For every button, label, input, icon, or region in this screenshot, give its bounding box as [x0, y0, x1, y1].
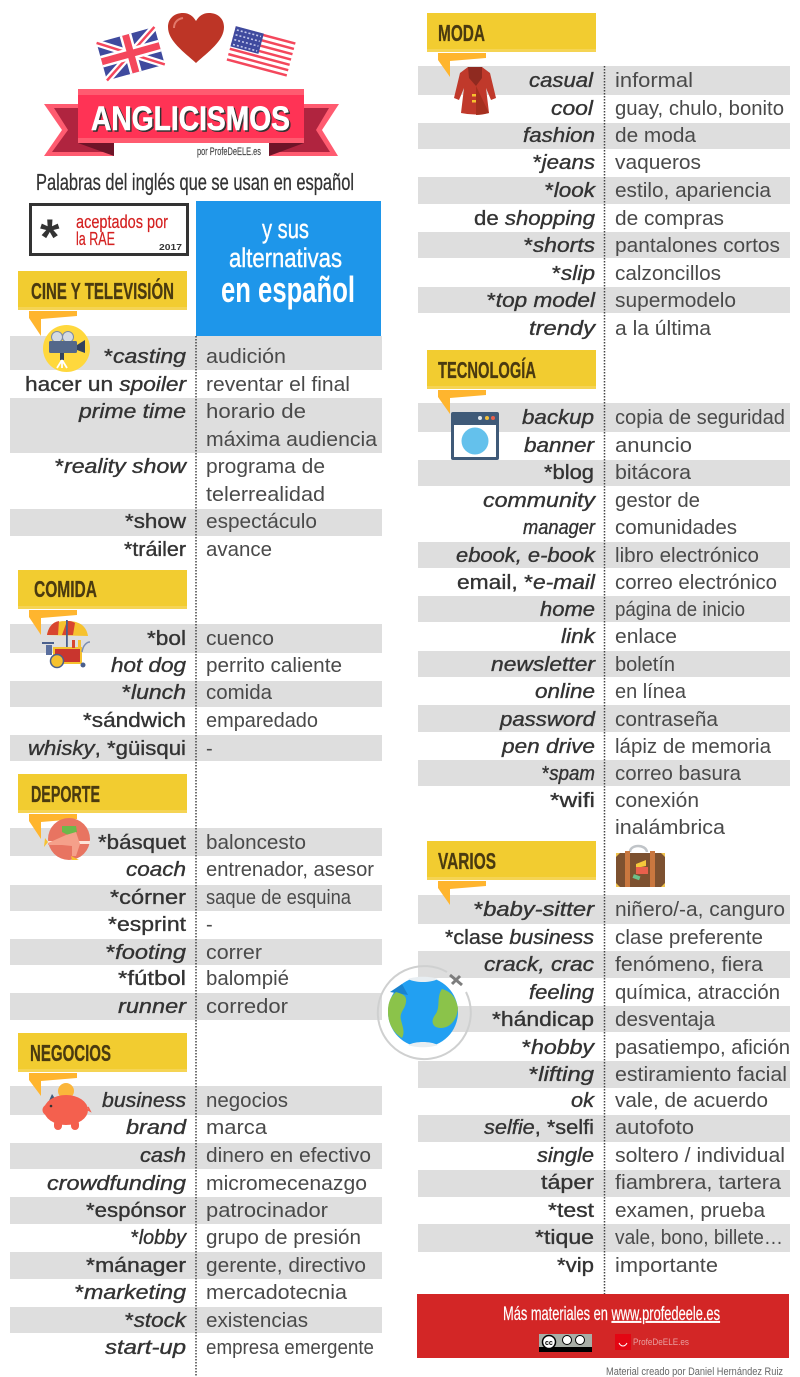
row: business: negocios	[206, 1090, 288, 1112]
row: community manager	[483, 490, 737, 539]
row: prime time	[10, 398, 382, 453]
panel: varios	[418, 895, 790, 1277]
icon: food cart	[42, 620, 90, 668]
row: hobby: *hobby	[522, 1037, 595, 1059]
row: online	[535, 681, 687, 703]
icon: profedeele logo	[615, 1334, 689, 1350]
row: esprint	[108, 914, 213, 936]
row: link: link	[561, 626, 596, 648]
row: fútbol	[118, 968, 289, 990]
subtitle: Palabras del inglés que se usan en español	[36, 169, 354, 195]
row: cool: guay, chulo, bonito	[615, 98, 784, 120]
heading: moda	[427, 13, 596, 77]
row: táper: táper	[541, 1172, 594, 1194]
row: prime time: prime time	[78, 401, 186, 423]
row: coach: coach	[126, 859, 186, 881]
row: jeans	[533, 152, 701, 174]
row: runner: runner	[118, 996, 188, 1018]
row: lunch: comida	[206, 682, 273, 704]
row: email	[457, 572, 777, 594]
row: mánager: *mánager	[86, 1255, 186, 1277]
row: marketing	[75, 1282, 348, 1304]
row: hot dog: hot dog	[111, 655, 186, 677]
row: tique: vale, bono, billete…	[615, 1227, 783, 1249]
row: business: business	[102, 1090, 186, 1112]
row: show: *show	[125, 511, 187, 533]
row: community manager: comunidades	[615, 517, 737, 539]
row: reality show: telerrealidad	[206, 484, 325, 506]
row: shorts: *shorts	[524, 235, 595, 257]
row: slip: *slip	[552, 263, 595, 285]
panel: y sus alternativas en español: y sus	[262, 214, 309, 244]
row: básquet	[10, 828, 382, 856]
row: newsletter	[418, 651, 790, 677]
row: córner	[10, 885, 382, 911]
panel: footer	[417, 1294, 789, 1358]
row: link: enlace	[615, 626, 677, 648]
row: lunch	[10, 681, 382, 707]
row: footing: *footing	[106, 942, 186, 964]
row: tráiler: avance	[206, 539, 272, 561]
row: start-up: empresa emergente	[206, 1337, 374, 1359]
row: wifi: conexión	[615, 790, 699, 812]
row: prime time: máxima audiencia	[206, 429, 378, 451]
row: espónsor: patrocinador	[206, 1200, 328, 1222]
row: hobby	[522, 1037, 790, 1059]
row: fashion	[418, 123, 790, 149]
row: start-up: start-up	[105, 1337, 186, 1359]
panel: deporte	[10, 828, 382, 1020]
icon: suitcase	[616, 846, 665, 887]
row: banner: anuncio	[615, 435, 692, 457]
panel: cine y televisión	[10, 336, 382, 561]
row: básquet: *básquet	[98, 832, 186, 854]
row: ebook: libro electrónico	[615, 545, 759, 567]
title text shadow: ANGLICISMOS	[92, 102, 292, 140]
row: crack: fenómeno, fiera	[615, 954, 764, 976]
row: feeling: química, atracción	[615, 982, 780, 1004]
row: tique	[418, 1224, 790, 1252]
row: fútbol: balompié	[206, 968, 289, 990]
heading: moda: MODA	[438, 20, 485, 46]
row: home: página de inicio	[615, 599, 745, 621]
row: tique: *tique	[535, 1227, 594, 1249]
row: home	[418, 596, 790, 622]
row: community manager: community	[483, 490, 596, 512]
row: marketing: mercadotecnia	[206, 1282, 348, 1304]
row: trendy: trendy	[529, 318, 596, 340]
row: casting	[10, 336, 382, 370]
row: link	[561, 626, 677, 648]
row: coach	[126, 859, 374, 881]
row: cash: dinero en efectivo	[206, 1145, 371, 1167]
row: blog: *blog	[544, 462, 594, 484]
row: shorts: pantalones cortos	[615, 235, 780, 257]
row: crack	[418, 951, 790, 978]
row: marketing: *marketing	[75, 1282, 186, 1304]
row: crack: crack, crac	[484, 954, 594, 976]
row: reality show: *reality show	[55, 456, 188, 478]
row: single: single	[537, 1145, 594, 1167]
row: cash: cash	[140, 1145, 186, 1167]
heading: tecnología: TECNOLOGÍA	[438, 356, 536, 383]
row: hándicap: desventaja	[615, 1009, 716, 1031]
heading: tecnología	[427, 350, 596, 414]
panel: tecnología	[418, 403, 790, 839]
row: lifting: *lifting	[529, 1064, 594, 1086]
icon: british flag	[97, 27, 165, 81]
icon: profedeele logo: ProfeDeELE.es	[633, 1337, 689, 1348]
row: online: online	[535, 681, 595, 703]
row: reality show: programa de	[206, 456, 325, 478]
row: hot dog: perrito caliente	[206, 655, 342, 677]
row: spam: correo basura	[615, 763, 742, 785]
row: crowdfunding: crowdfunding	[47, 1173, 186, 1195]
row: hobby: pasatiempo, afición	[615, 1037, 790, 1059]
heading: comida	[18, 570, 187, 635]
row: email: correo electrónico	[615, 572, 777, 594]
row: baby-sitter: *baby-sitter	[474, 899, 596, 921]
row: look: *look	[545, 180, 596, 202]
row: shopping: de shopping	[474, 208, 595, 230]
icon: piggy bank	[42, 1083, 90, 1130]
icon: american flag	[226, 26, 296, 78]
row: casting: *casting	[104, 346, 186, 368]
row: lobby: grupo de presión	[206, 1227, 361, 1249]
row: casual	[418, 66, 790, 95]
heading: deporte	[18, 774, 187, 839]
row: whisky: -	[206, 738, 213, 760]
row: spoiler	[25, 374, 350, 396]
row: vip: importante	[615, 1255, 718, 1277]
row: pen drive: pen drive	[501, 736, 595, 758]
row: fashion: de moda	[615, 125, 697, 147]
row: show: espectáculo	[206, 511, 317, 533]
row: lobby: *lobby	[131, 1227, 187, 1249]
row: home: home	[540, 599, 595, 621]
row: test	[548, 1200, 766, 1222]
row: backup: backup	[522, 407, 594, 429]
row: footing	[10, 939, 382, 965]
row: blog: bitácora	[615, 462, 692, 484]
row: spoiler: reventar el final	[206, 374, 350, 396]
icon: red coat	[454, 67, 496, 115]
row: whisky	[10, 735, 382, 761]
row: selfie: selfie, *selfi	[484, 1117, 594, 1139]
row: shopping	[474, 208, 724, 230]
row: selfie: autofoto	[615, 1117, 694, 1139]
row: slip	[552, 263, 721, 285]
panel: y sus alternativas en español: en español	[221, 269, 355, 310]
row: cool: cool	[551, 98, 594, 120]
row: shorts	[418, 232, 790, 258]
row: coach: entrenador, asesor	[206, 859, 374, 881]
row: show	[10, 509, 382, 536]
row: jeans: *jeans	[533, 152, 595, 174]
row: vip: *vip	[557, 1255, 594, 1277]
row: fútbol: *fútbol	[118, 968, 186, 990]
icon: heart	[168, 13, 224, 63]
row: tráiler	[124, 539, 272, 561]
heading: comida: COMIDA	[34, 576, 97, 602]
row: backup: copia de seguridad	[615, 407, 785, 429]
row: newsletter: boletín	[615, 654, 675, 676]
row: hándicap	[418, 1006, 790, 1032]
row: password	[418, 705, 790, 732]
row: password: password	[499, 709, 596, 731]
footer link text: Más materiales en www.profedeele.es	[503, 1304, 720, 1325]
row: slip: calzoncillos	[615, 263, 721, 285]
heading: cine y televisión	[18, 271, 187, 336]
title text: ANGLICISMOS	[91, 100, 290, 138]
row: clase business	[445, 927, 763, 949]
row: esprint: -	[206, 914, 213, 936]
row: community manager: gestor de	[615, 490, 700, 512]
row: look	[418, 177, 790, 204]
row: wifi: inalámbrica	[615, 817, 726, 839]
row: feeling	[529, 982, 780, 1004]
row: ok: vale, de acuerdo	[615, 1090, 768, 1112]
legend: aceptados por la RAE: *	[40, 209, 60, 265]
row: runner: corredor	[206, 996, 288, 1018]
row: trendy	[529, 318, 712, 340]
row: esprint: *esprint	[108, 914, 187, 936]
row: hándicap: *hándicap	[492, 1009, 594, 1031]
row: banner: banner	[524, 435, 595, 457]
row: hot dog	[111, 655, 342, 677]
heading: varios	[427, 841, 596, 905]
icon: athlete	[44, 818, 90, 860]
row: selfie	[418, 1115, 790, 1142]
row: ebook: ebook, e-book	[456, 545, 596, 567]
heading: cine y televisión: CINE Y TELEVISIÓN	[31, 277, 174, 304]
row: espónsor	[10, 1197, 382, 1224]
heading: varios: VARIOS	[438, 848, 496, 874]
row: single: soltero / individual	[615, 1145, 785, 1167]
row: casting: audición	[206, 346, 286, 368]
row: spam: *spam	[542, 763, 595, 785]
heading: deporte: DEPORTE	[31, 781, 100, 807]
row: newsletter: newsletter	[491, 654, 597, 676]
row: banner	[524, 435, 692, 457]
row: básquet: baloncesto	[206, 832, 306, 854]
row: look: estilo, apariencia	[615, 180, 772, 202]
row: espónsor: *espónsor	[86, 1200, 186, 1222]
title banner	[44, 89, 339, 158]
legend: aceptados por la RAE: aceptados por	[76, 212, 168, 232]
row: stock: *stock	[125, 1310, 187, 1332]
row: sándwich	[83, 710, 318, 732]
row: tráiler: *tráiler	[124, 539, 186, 561]
row: vip	[557, 1255, 718, 1277]
row: bol	[10, 624, 382, 653]
icon: creative commons badge: cc	[545, 1340, 553, 1347]
row: brand	[126, 1117, 268, 1139]
row: fashion: fashion	[523, 125, 595, 147]
row: jeans: vaqueros	[615, 152, 701, 174]
row: community manager: manager	[523, 517, 596, 539]
row: clase business: *clase business	[445, 927, 594, 949]
row: brand: marca	[206, 1117, 268, 1139]
row: crowdfunding	[47, 1173, 367, 1195]
legend: aceptados por la RAE: la RAE	[76, 229, 115, 249]
row: email: email, * e-mail	[457, 572, 596, 594]
row: brand: brand	[126, 1117, 187, 1139]
row: córner: saque de esquina	[206, 887, 352, 909]
row: lunch: *lunch	[122, 682, 186, 704]
row: footing: correr	[206, 942, 262, 964]
row: wifi	[550, 790, 726, 839]
row: spam	[418, 760, 790, 786]
row: casual: informal	[615, 70, 693, 92]
row: bol: cuenco	[206, 628, 274, 650]
row: táper	[418, 1170, 790, 1197]
row: blog	[418, 460, 790, 486]
panel: moda	[418, 66, 790, 340]
panel: comida	[10, 624, 382, 761]
row: top model	[418, 287, 790, 313]
row: top model: *top model	[487, 290, 596, 312]
row: crowdfunding: micromecenazgo	[206, 1173, 367, 1195]
row: pen drive	[501, 736, 772, 758]
row: ok: ok	[571, 1090, 595, 1112]
row: baby-sitter: niñero/-a, canguro	[615, 899, 785, 921]
row: ebook	[418, 542, 790, 568]
row: baby-sitter	[418, 895, 790, 924]
byline: por ProfeDeELE.es	[197, 146, 261, 158]
row: trendy: a la última	[615, 318, 712, 340]
icon: globe with plane	[378, 966, 471, 1059]
row: whisky: whisky , *güisqui	[28, 738, 186, 760]
row: top model: supermodelo	[615, 290, 736, 312]
row: stock	[10, 1307, 382, 1333]
panel: y sus alternativas en español: alternativas	[229, 243, 342, 273]
row: mánager	[10, 1252, 382, 1279]
heading: negocios	[18, 1033, 187, 1096]
row: spoiler: hacer un spoiler	[25, 374, 188, 396]
icon: creative commons badge	[539, 1334, 592, 1352]
row: password: contraseña	[615, 709, 719, 731]
icon: film camera	[43, 325, 90, 372]
row: runner	[10, 993, 382, 1020]
row: online: en línea	[615, 681, 687, 703]
legend: aceptados por la RAE: 2017	[159, 242, 182, 252]
row: mánager: gerente, directivo	[206, 1255, 366, 1277]
row: táper: fiambrera, tartera	[615, 1172, 782, 1194]
row: lifting: estiramiento facial	[615, 1064, 787, 1086]
row: lifting	[418, 1061, 790, 1088]
row: pen drive: lápiz de memoria	[615, 736, 772, 758]
row: clase business: clase preferente	[615, 927, 763, 949]
row: test: *test	[548, 1200, 594, 1222]
heading: negocios: NEGOCIOS	[30, 1040, 111, 1066]
panel: negocios	[10, 1086, 382, 1359]
row: casual: casual	[529, 70, 594, 92]
row: lobby	[131, 1227, 361, 1249]
row: sándwich: *sándwich	[83, 710, 186, 732]
row: stock: existencias	[206, 1310, 308, 1332]
row: bol: *bol	[147, 628, 186, 650]
row: start-up	[105, 1337, 374, 1359]
row: feeling: feeling	[529, 982, 594, 1004]
row: wifi: *wifi	[550, 790, 595, 812]
row: backup	[418, 403, 790, 432]
row: prime time: horario de	[206, 401, 306, 423]
row: reality show	[55, 456, 325, 506]
row: córner: *córner	[110, 887, 186, 909]
legend: aceptados por la RAE	[30, 204, 188, 265]
row: shopping: de compras	[615, 208, 724, 230]
icon: browser window	[451, 412, 499, 460]
row: cash	[10, 1143, 382, 1169]
row: test: examen, prueba	[615, 1200, 766, 1222]
row: business	[10, 1086, 382, 1115]
panel: y sus alternativas en español	[196, 201, 381, 336]
row: single	[537, 1145, 785, 1167]
row: sándwich: emparedado	[206, 710, 318, 732]
